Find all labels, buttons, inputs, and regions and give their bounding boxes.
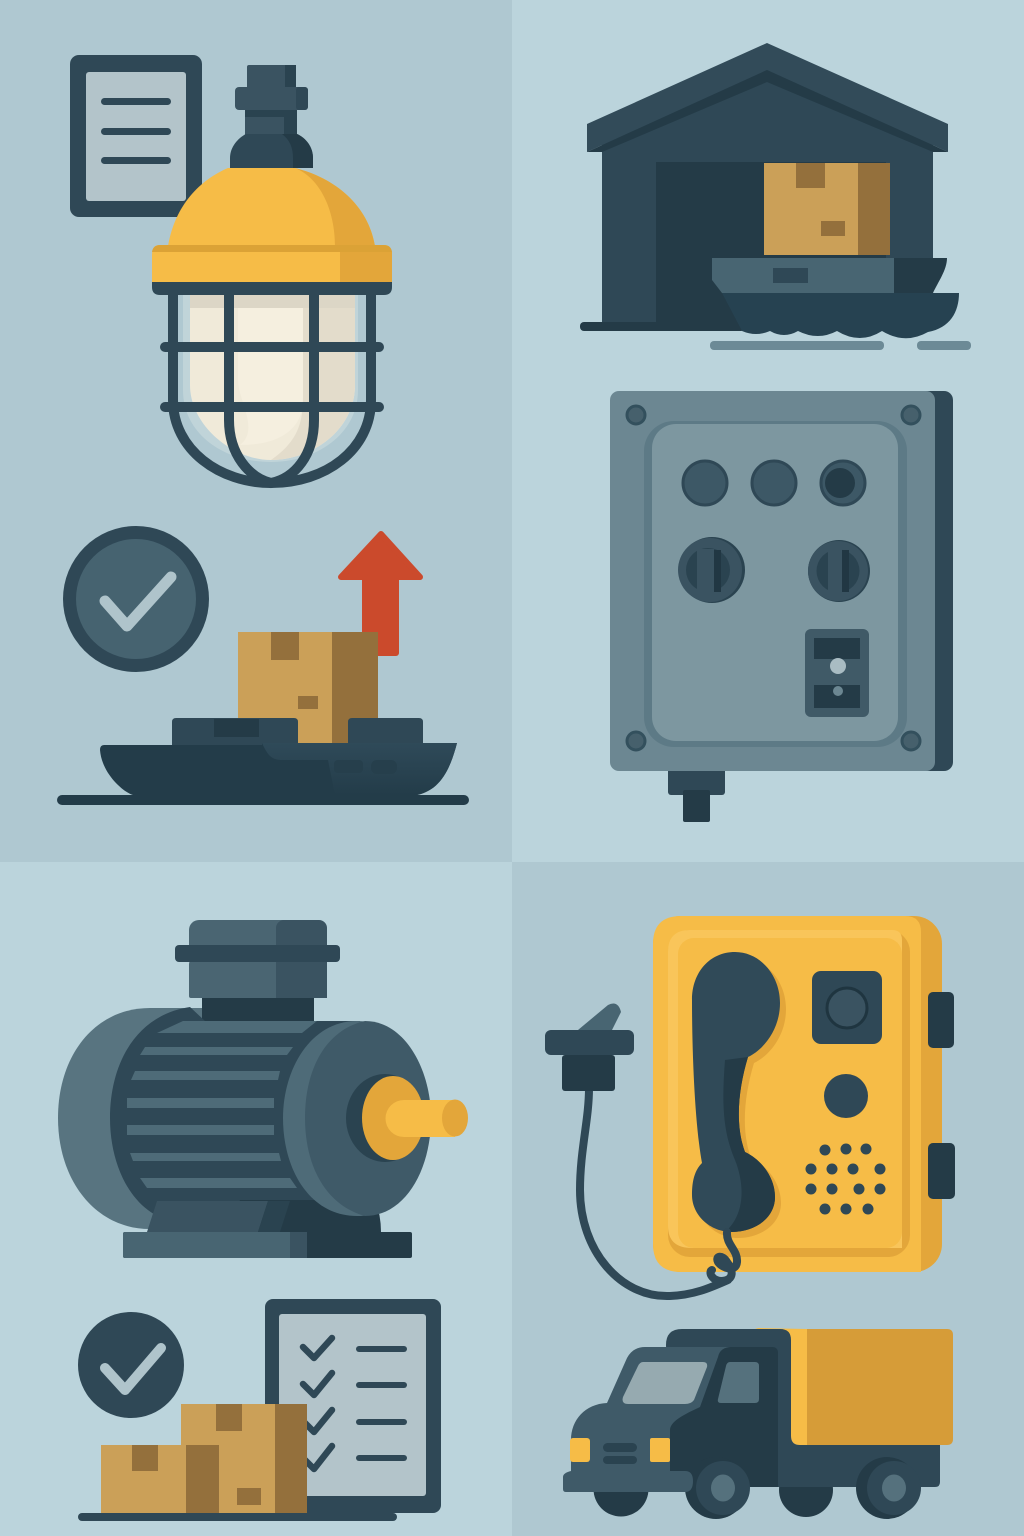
corner screws xyxy=(627,406,920,750)
icon: document xyxy=(70,55,202,217)
icon: warehouse with box and boat xyxy=(580,43,971,350)
ship hull xyxy=(57,718,469,805)
red up arrow xyxy=(341,534,420,653)
motor front cover xyxy=(283,1021,431,1216)
motor top terminal xyxy=(175,920,340,1025)
rotary knobs xyxy=(678,537,870,603)
phone cable and plug xyxy=(545,1004,737,1296)
cardboard box xyxy=(238,632,378,744)
icon: cargo ship with box and arrow xyxy=(57,534,469,805)
lamp cap xyxy=(230,65,313,168)
panel: top left background xyxy=(0,0,512,862)
truck bumper xyxy=(563,1471,693,1492)
icon: stacked boxes xyxy=(78,1404,397,1521)
truck front wheels xyxy=(685,1457,921,1519)
toggle switch xyxy=(805,629,869,717)
motor finned body xyxy=(110,1007,360,1222)
lamp yellow dome xyxy=(152,168,392,282)
icon: industrial telephone xyxy=(545,916,955,1296)
icon: explosion-proof lamp xyxy=(152,65,392,483)
truck rear wheels behind body xyxy=(594,1462,833,1517)
icon: checklist xyxy=(265,1299,441,1513)
icon: control box xyxy=(610,391,953,822)
boat xyxy=(710,258,971,350)
phone handset xyxy=(692,952,786,1238)
push buttons xyxy=(683,461,865,505)
icon: electric motor xyxy=(58,920,468,1258)
icon: check badge xyxy=(63,526,209,672)
panel: bottom right background xyxy=(512,862,1024,1536)
phone body xyxy=(653,916,942,1272)
truck cargo xyxy=(755,1328,953,1445)
phone camera xyxy=(812,971,882,1044)
panel: bottom left background xyxy=(0,862,512,1536)
phone side latches xyxy=(928,992,955,1199)
motor back cover xyxy=(58,1008,220,1229)
motor shaft xyxy=(362,1076,468,1160)
panel: top right background xyxy=(512,0,1024,862)
truck body xyxy=(666,1329,940,1487)
lamp guard cage xyxy=(152,282,392,483)
box in warehouse xyxy=(764,163,890,255)
icon: check badge small xyxy=(78,1312,184,1418)
truck cab xyxy=(570,1347,778,1487)
warehouse building xyxy=(580,43,948,331)
motor base xyxy=(123,1200,412,1258)
phone speaker grille xyxy=(806,1144,886,1214)
lamp glass xyxy=(183,290,358,462)
icon: delivery truck xyxy=(563,1328,953,1519)
phone button xyxy=(824,1074,868,1118)
